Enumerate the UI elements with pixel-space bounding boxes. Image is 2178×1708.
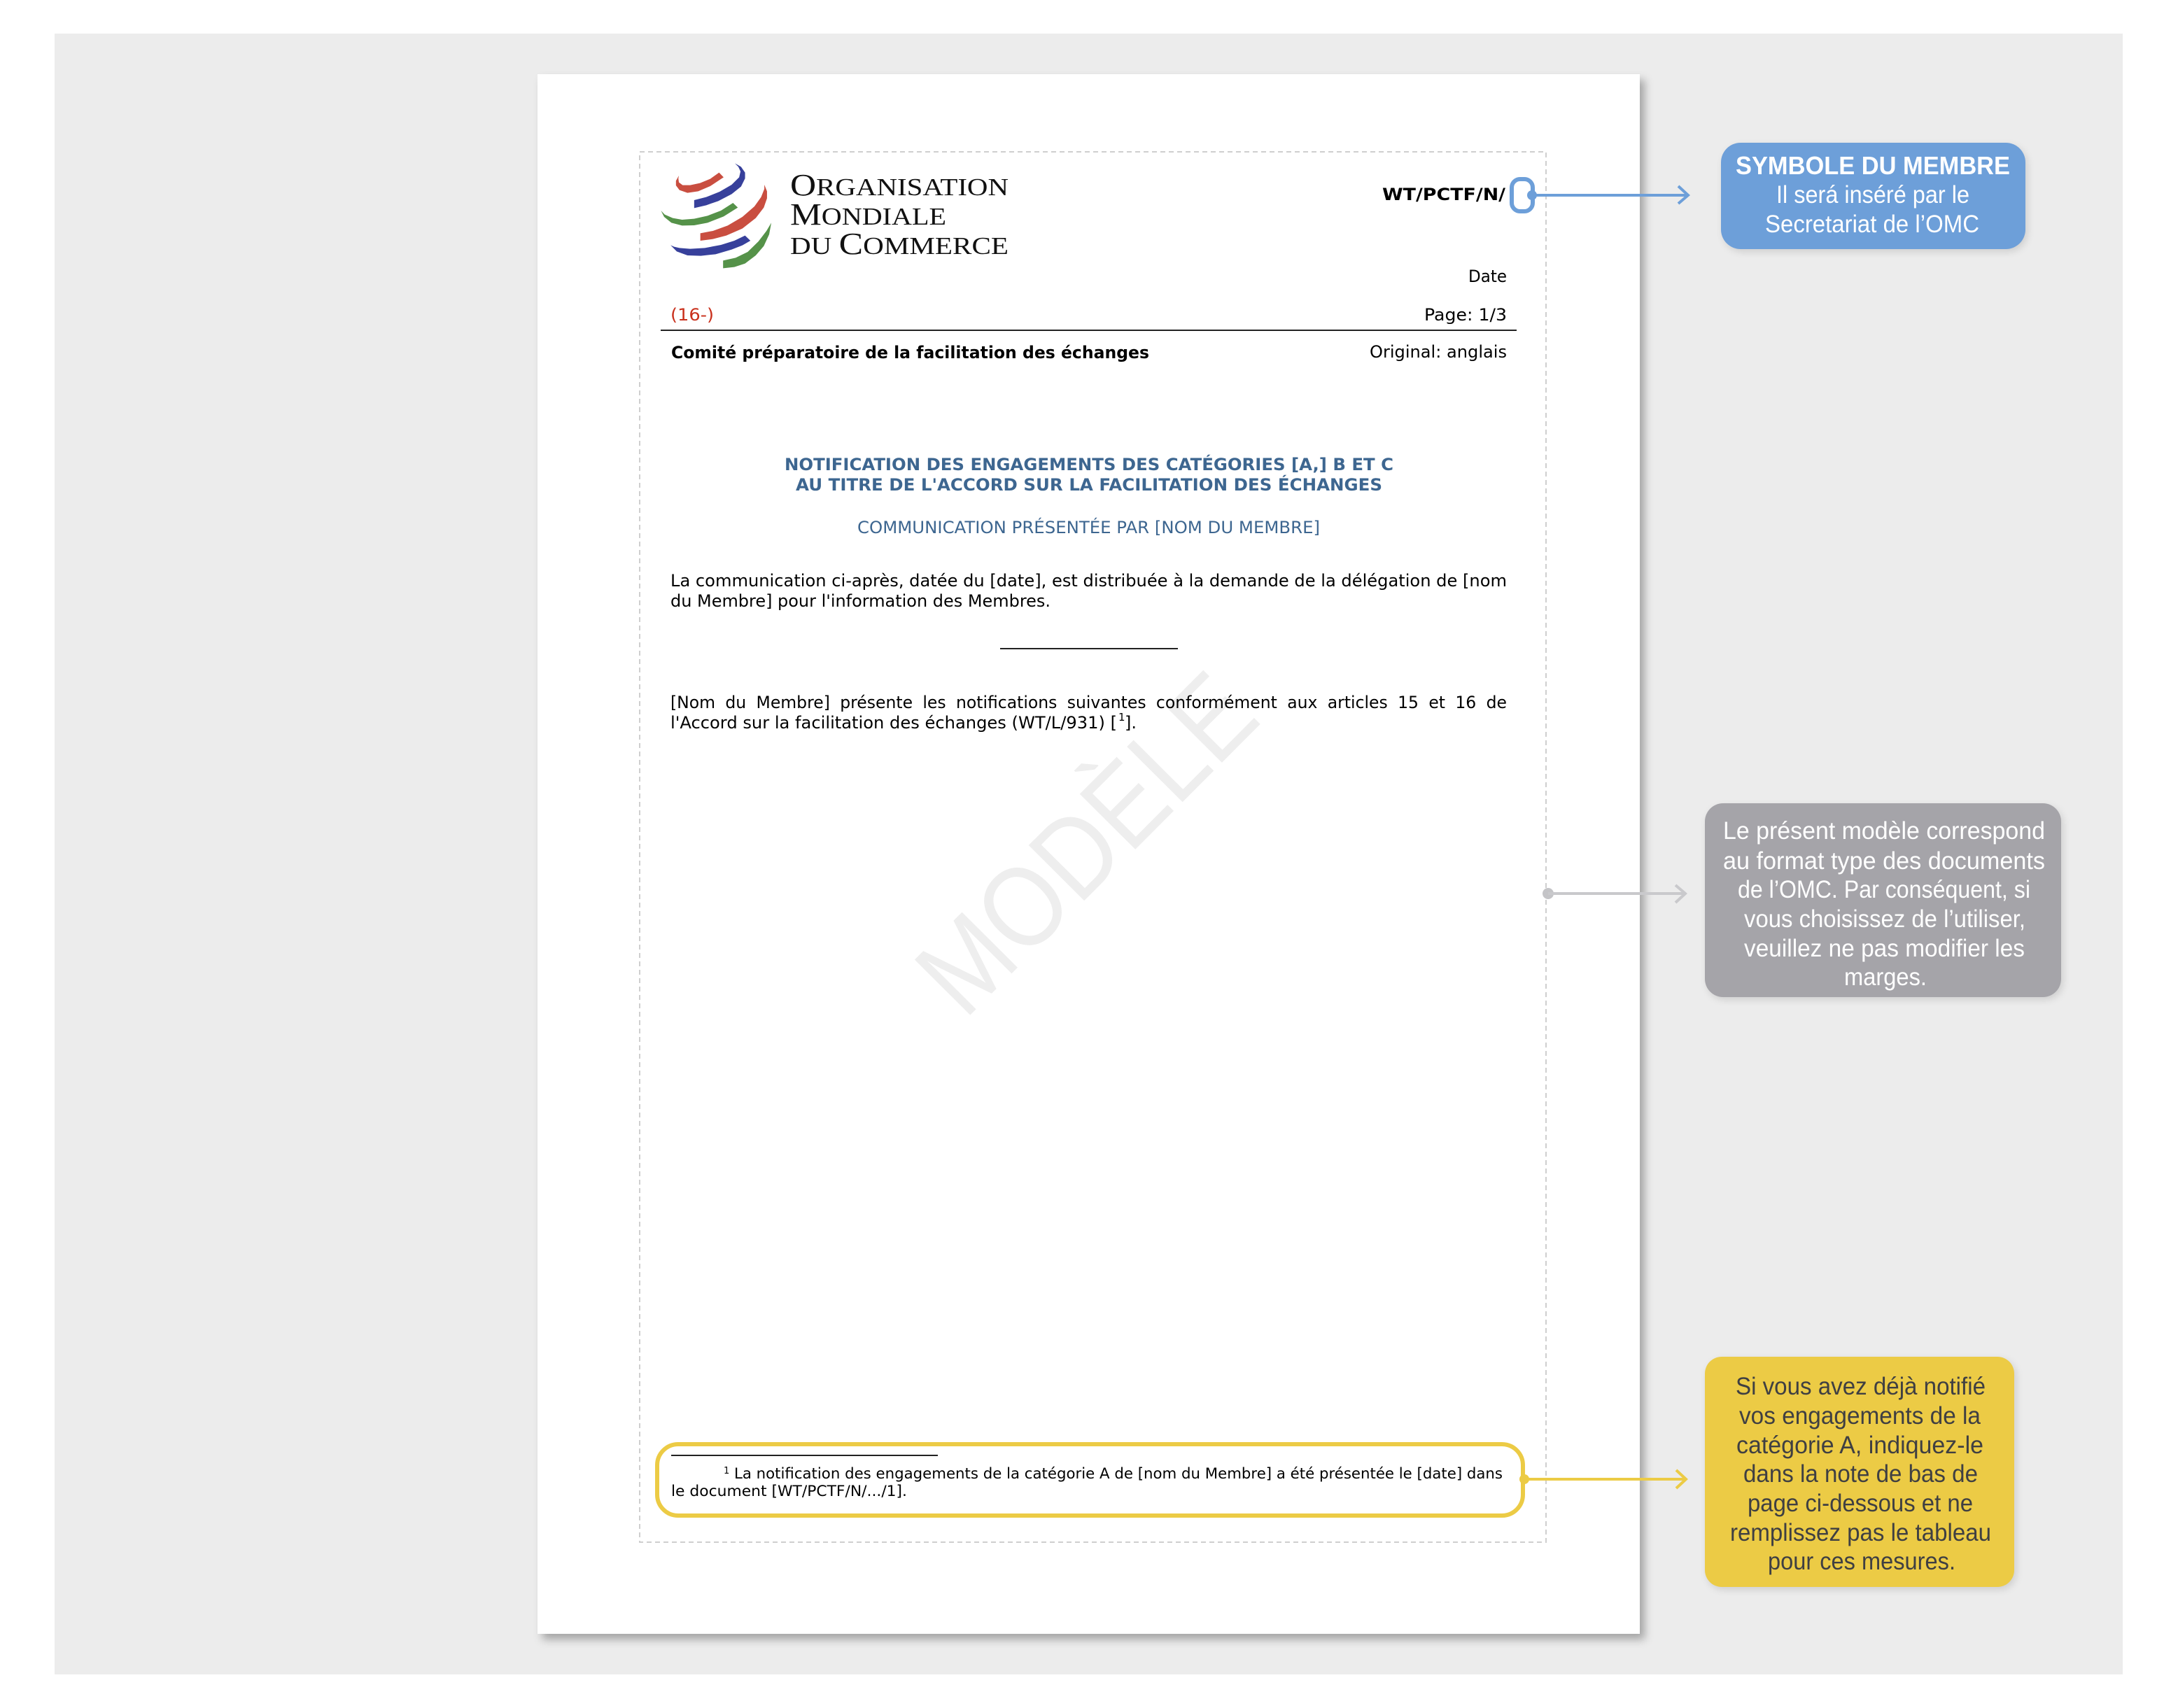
watermark: MODÈLE: MODÈLE [891, 648, 1281, 1038]
arrow: footnote to yellow callout [1519, 1470, 1686, 1488]
callout: margins (gray): au format type des documents [1723, 847, 2045, 875]
document title [785, 454, 1393, 495]
footnote separator [671, 1455, 938, 1456]
intro paragraph: La communication ci-après, datée du [date], est distribuée à la demande de la délégation de [nom [670, 571, 1507, 591]
callout: footnote instructions (yellow): Si vous avez déjà notifié [1736, 1373, 1986, 1400]
callout: margins (gray): marges. [1844, 964, 1927, 991]
arrow: margins to gray callout [1543, 885, 1685, 903]
arrow: symbol to blue callout [1527, 186, 1688, 204]
highlight: footnote frame [657, 1444, 1523, 1516]
document symbol: WT/PCTF/N/ [1382, 185, 1505, 204]
notification paragraph: [Nom du Membre] présente les notifications suivantes conformément aux articles 15 et 16 de [670, 693, 1507, 712]
notification paragraph: l'Accord sur la facilitation des échanges (WT/L/931) [ [670, 713, 1117, 733]
callout: member symbol (blue): Secretariat de l’OMC [1765, 211, 1979, 238]
callout: footnote instructions (yellow): page ci-dessous et ne [1748, 1490, 1973, 1517]
logo: WTO swooshes [661, 163, 771, 268]
callout: footnote instructions (yellow): dans la note de bas de [1743, 1460, 1978, 1488]
notification paragraph [670, 693, 1507, 733]
subtitle: COMMUNICATION PRÉSENTÉE PAR [NOM DU MEMBRE] [857, 517, 1320, 537]
document title: AU TITRE DE L'ACCORD SUR LA FACILITATION DES ÉCHANGES [796, 474, 1382, 495]
callout: margins (gray): Le présent modèle correspond [1723, 817, 2045, 845]
footnote: le document [WT/PCTF/N/.../1]. [671, 1483, 907, 1499]
intro paragraph: du Membre] pour l'information des Membres. [670, 591, 1051, 611]
committee name: Comité préparatoire de la facilitation des échanges [671, 343, 1149, 362]
document reference number: (16-) [670, 305, 714, 325]
callout: footnote instructions (yellow): vos engagements de la [1739, 1402, 1981, 1430]
notification paragraph: 1 [1118, 711, 1125, 724]
callout: margins (gray): vous choisissez de l’utiliser, [1744, 905, 2025, 933]
footnote: La notification des engagements de la catégorie A de [nom du Membre] a été présentée le [date] dans [734, 1465, 1503, 1482]
logo: organisation name [790, 168, 1009, 261]
logo: organisation name: ORGANISATION [790, 168, 1009, 202]
callout: footnote instructions (yellow): pour ces mesures. [1768, 1548, 1955, 1575]
intro paragraph [670, 571, 1507, 611]
footnote: 1 [724, 1466, 729, 1476]
callout: footnote instructions (yellow): remplissez pas le tableau [1730, 1519, 1991, 1546]
callout: margins (gray): veuillez ne pas modifier les [1744, 935, 2025, 962]
logo: organisation name: DU COMMERCE [790, 227, 1009, 261]
document title: NOTIFICATION DES ENGAGEMENTS DES CATÉGORIES [A,] B ET C [785, 454, 1393, 474]
date: Date [1468, 267, 1507, 286]
footnote [671, 1465, 1503, 1499]
callout: margins (gray) [1705, 803, 2061, 997]
highlight: symbol bracket [1512, 179, 1533, 211]
callout: margins (gray): de l’OMC. Par conséquent, si [1738, 876, 2030, 903]
callout: member symbol (blue): SYMBOLE DU MEMBRE [1736, 151, 2010, 180]
logo: organisation name: MONDIALE [790, 197, 946, 232]
callout: member symbol (blue) [1721, 143, 2025, 249]
callout: member symbol (blue): Il será inséré par le [1776, 181, 1969, 209]
page number: Page: 1/3 [1424, 305, 1507, 325]
callout: footnote instructions (yellow): catégorie A, indiquez-le [1736, 1432, 1983, 1459]
document page [538, 74, 1640, 1634]
callout: footnote instructions (yellow) [1705, 1357, 2014, 1587]
original language: Original: anglais [1370, 342, 1507, 362]
margin guide dashed frame [640, 152, 1546, 1542]
notification paragraph: ]. [1125, 713, 1137, 733]
